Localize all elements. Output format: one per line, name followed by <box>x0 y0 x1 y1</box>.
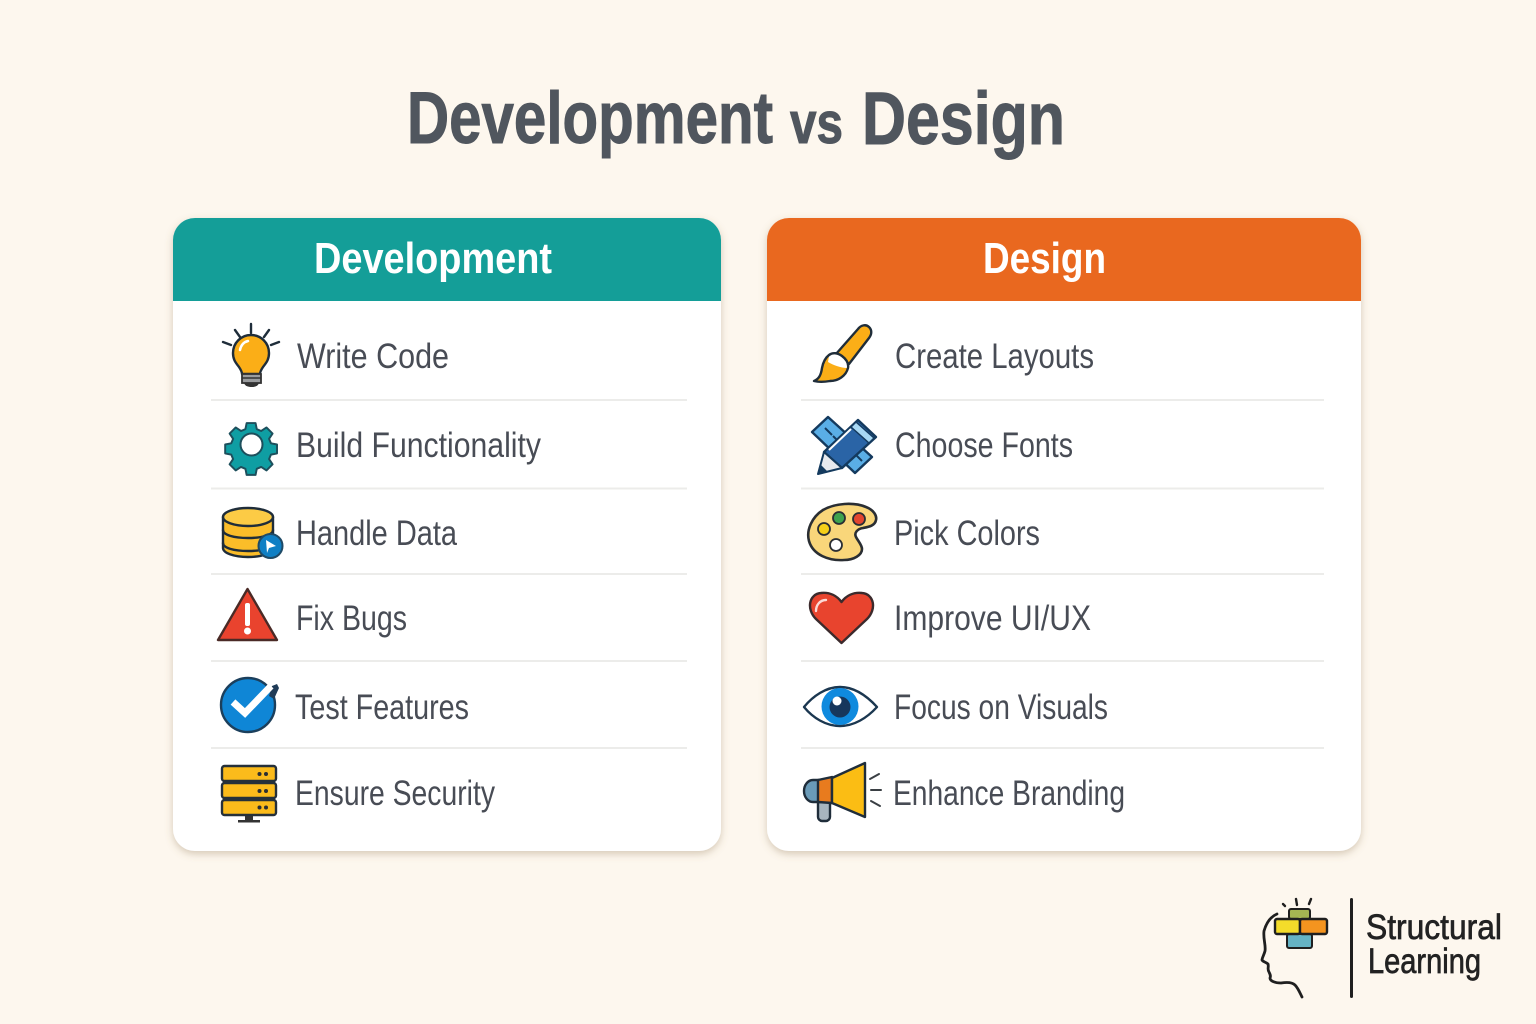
title: Design <box>862 77 1065 160</box>
icon: warning triangle <box>218 589 277 640</box>
icon: check circle <box>221 678 279 732</box>
logo wordmark: Learning <box>1368 942 1481 981</box>
row: create layouts <box>814 325 1094 382</box>
row: test features <box>221 678 469 732</box>
icon: megaphone <box>804 763 881 821</box>
icon: server stack <box>222 766 276 822</box>
development header <box>173 218 721 301</box>
development header: Development <box>314 234 552 283</box>
label: enhance branding: Enhance Branding <box>893 774 1125 813</box>
design header <box>767 218 1361 301</box>
row: enhance branding <box>804 763 1125 821</box>
logo divider <box>1350 898 1353 998</box>
label: fix bugs: Fix Bugs <box>296 599 407 638</box>
label: focus on visuals: Focus on Visuals <box>894 688 1108 727</box>
icon: database <box>223 508 282 558</box>
label: ensure security: Ensure Security <box>295 774 495 813</box>
row: choose fonts <box>812 417 1073 474</box>
label: test features: Test Features <box>295 688 469 727</box>
logo wordmark <box>1366 908 1502 981</box>
row: fix bugs <box>218 589 407 640</box>
label: create layouts: Create Layouts <box>895 337 1094 376</box>
label: choose fonts: Choose Fonts <box>895 426 1073 465</box>
label: write code: Write Code <box>297 337 449 376</box>
icon: heart <box>810 593 873 643</box>
label: improve ui/ux: Improve UI/UX <box>894 599 1091 638</box>
title: Development <box>407 78 773 159</box>
icon: ruler and pencil <box>812 417 876 474</box>
panel: design <box>767 218 1361 851</box>
row: handle data <box>223 508 457 558</box>
title: vs <box>790 91 843 156</box>
title <box>407 77 1065 160</box>
panel: development <box>173 218 721 851</box>
logo icon: head with blocks <box>1262 899 1327 997</box>
logo: structural learning <box>1262 898 1502 998</box>
logo wordmark: Structural <box>1366 908 1502 947</box>
icon: paintbrush <box>814 325 871 382</box>
row: ensure security <box>222 766 495 822</box>
label: handle data: Handle Data <box>296 514 457 553</box>
icon: eye <box>804 687 877 726</box>
design header: Design <box>983 234 1106 283</box>
row: write code <box>223 324 449 387</box>
icon: light bulb <box>223 324 279 387</box>
row: pick colors <box>808 504 1040 560</box>
icon: gear <box>225 423 277 475</box>
row: focus on visuals <box>804 687 1108 727</box>
row: improve ui/ux <box>810 593 1091 643</box>
row: build functionality <box>225 423 541 475</box>
label: build functionality: Build Functionality <box>296 426 541 465</box>
icon: palette <box>808 504 876 560</box>
label: pick colors: Pick Colors <box>894 514 1040 553</box>
